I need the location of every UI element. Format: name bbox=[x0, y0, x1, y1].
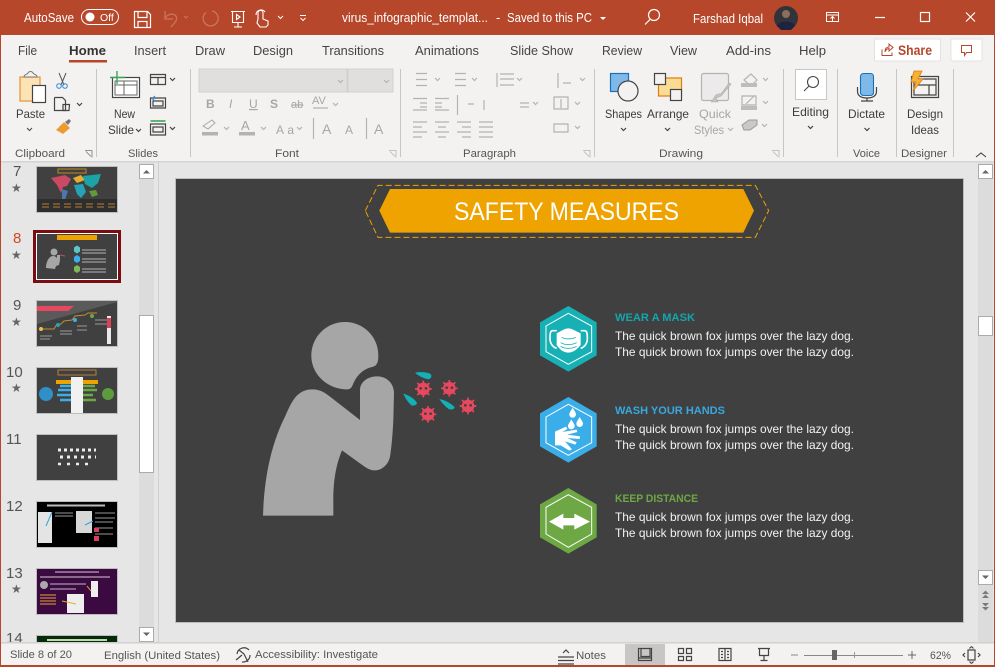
ribbon group: editing bbox=[792, 70, 829, 128]
ribbon group: font: I bbox=[229, 97, 233, 111]
ribbon group: slides: Slide bbox=[108, 123, 134, 137]
ribbon group: font: A bbox=[345, 123, 353, 137]
status bar: English (United States) bbox=[104, 650, 220, 662]
ribbon tabs: Add-ins bbox=[726, 43, 772, 58]
ribbon tabs: Review bbox=[602, 43, 643, 58]
text block: keep distance: The quick brown fox jumps over the lazy dog. bbox=[615, 526, 854, 540]
title banner: SAFETY MEASURES bbox=[454, 198, 679, 226]
thumbnail 7: world map: 7 bbox=[13, 163, 21, 180]
title bar: Saved to this PC bbox=[507, 10, 592, 25]
ribbon tabs: Animations bbox=[415, 43, 479, 58]
ribbon group: designer: Designer bbox=[901, 148, 947, 160]
thumbnail 8: selected slide bbox=[11, 230, 121, 283]
text block: wash your hands: WASH YOUR HANDS bbox=[615, 405, 725, 417]
ribbon group: drawing bbox=[605, 74, 779, 160]
title bar: virus_infographic_templat... bbox=[342, 10, 488, 25]
status bar: Notes bbox=[576, 650, 607, 662]
ribbon group: font: A bbox=[322, 121, 332, 137]
thumbnail 9: timeline: ★ bbox=[11, 315, 22, 329]
icon: wear a mask bbox=[540, 306, 597, 372]
ribbon group: font: B bbox=[206, 97, 215, 111]
ribbon group: drawing: Styles bbox=[694, 123, 724, 137]
ribbon tabs bbox=[1, 35, 994, 162]
ribbon group: drawing: Arrange bbox=[647, 107, 689, 121]
thumbnail 14 bbox=[6, 630, 118, 647]
text block: wear a mask bbox=[615, 312, 854, 359]
ribbon tabs: Help bbox=[799, 43, 826, 58]
ribbon group: drawing: Drawing bbox=[659, 148, 703, 160]
thumbnail 8: selected slide: 8 bbox=[13, 230, 21, 247]
ribbon group: drawing: Shapes bbox=[605, 107, 642, 121]
thumbnail 10: ★ bbox=[11, 381, 22, 395]
share button bbox=[874, 39, 982, 61]
ribbon tabs: Home bbox=[69, 43, 106, 58]
thumbnail 14: 14 bbox=[6, 630, 23, 647]
ribbon group: font: Aa bbox=[276, 123, 294, 137]
icon: keep distance bbox=[540, 488, 597, 554]
title bar bbox=[0, 0, 995, 35]
title bar: - bbox=[496, 10, 500, 25]
ribbon group: clipboard bbox=[15, 72, 92, 160]
thumbnail 11 bbox=[6, 431, 118, 480]
text block: wash your hands bbox=[615, 405, 854, 452]
title banner bbox=[365, 185, 769, 237]
status bar: Accessibility: Investigate bbox=[255, 649, 378, 661]
ribbon group: designer: Ideas bbox=[911, 123, 939, 137]
ribbon tabs: Draw bbox=[195, 43, 226, 58]
title bar: AutoSave bbox=[24, 10, 74, 25]
status bar bbox=[1, 642, 994, 665]
ribbon tabs: View bbox=[670, 43, 698, 58]
ribbon group: voice: Voice bbox=[853, 148, 880, 160]
ribbon tabs: Transitions bbox=[322, 43, 384, 58]
share button: Share bbox=[898, 43, 932, 58]
text block: wear a mask: WEAR A MASK bbox=[615, 312, 695, 324]
thumbnail 7: world map: ★ bbox=[11, 181, 22, 195]
ribbon group: font: A bbox=[241, 118, 250, 133]
thumbnail 7: world map bbox=[11, 163, 118, 212]
thumbnail 9: timeline bbox=[11, 297, 118, 346]
icon: wash your hands bbox=[540, 397, 597, 463]
thumbnail 13 bbox=[6, 565, 118, 614]
thumbnail 12 bbox=[6, 498, 118, 548]
text block: keep distance: The quick brown fox jumps over the lazy dog. bbox=[615, 510, 854, 524]
ribbon tabs: File bbox=[18, 43, 37, 58]
thumbnail 9: timeline: 9 bbox=[13, 297, 21, 314]
thumbnail pane bbox=[6, 163, 121, 647]
title bar: Off bbox=[100, 12, 114, 24]
thumbnail 13: ★ bbox=[11, 582, 22, 596]
thumbnail 10: 10 bbox=[6, 364, 23, 381]
ribbon tabs: Design bbox=[253, 43, 293, 58]
status bar: Slide 8 of 20 bbox=[10, 649, 72, 661]
ribbon group: clipboard: Paste bbox=[16, 107, 45, 121]
ribbon group: font: ab bbox=[291, 99, 303, 111]
ribbon group: voice bbox=[848, 74, 885, 160]
ribbon group: font: Font bbox=[275, 148, 299, 160]
ribbon tabs: Slide Show bbox=[510, 43, 574, 58]
text block: wash your hands: The quick brown fox jumps over the lazy dog. bbox=[615, 422, 854, 436]
virus particles and droplets bbox=[403, 372, 476, 423]
ribbon group: slides: New bbox=[114, 107, 135, 121]
ribbon group: font: S bbox=[270, 97, 278, 111]
text block: wear a mask: The quick brown fox jumps over the lazy dog. bbox=[615, 329, 854, 343]
ribbon group: font: AV bbox=[312, 95, 327, 107]
thumbnail 10 bbox=[6, 364, 118, 414]
thumbnail 13: 13 bbox=[6, 565, 23, 582]
status bar: 62% bbox=[930, 650, 951, 662]
slide canvas bbox=[176, 178, 964, 622]
thumbnail 8: selected slide: ★ bbox=[11, 248, 22, 262]
ribbon group: paragraph: Paragraph bbox=[463, 148, 516, 160]
coughing person figure bbox=[263, 322, 394, 516]
ribbon group: drawing: Quick bbox=[699, 107, 732, 121]
ribbon group: voice: Dictate bbox=[848, 107, 885, 121]
thumbnail 11: 11 bbox=[6, 431, 22, 448]
ribbon group: editing: Editing bbox=[792, 105, 829, 119]
right scrollbar bbox=[978, 162, 993, 643]
ribbon group: clipboard: Clipboard bbox=[15, 148, 65, 160]
left scrollbar bbox=[139, 162, 158, 643]
ribbon group: paragraph bbox=[413, 73, 590, 160]
text block: wear a mask: The quick brown fox jumps over the lazy dog. bbox=[615, 345, 854, 359]
ribbon group: slides bbox=[108, 71, 175, 160]
ribbon group: font: A bbox=[374, 121, 384, 137]
thumbnail 12: 12 bbox=[6, 498, 23, 515]
text block: wash your hands: The quick brown fox jumps over the lazy dog. bbox=[615, 438, 854, 452]
ribbon group: slides: Slides bbox=[128, 148, 158, 160]
ribbon tabs: Insert bbox=[134, 43, 166, 58]
ribbon group: font: U bbox=[249, 97, 258, 111]
text block: keep distance: KEEP DISTANCE bbox=[615, 493, 698, 505]
ribbon group: font bbox=[199, 69, 396, 160]
ribbon group: designer bbox=[901, 71, 986, 160]
title bar: Farshad Iqbal bbox=[693, 11, 763, 26]
ribbon group: designer: Design bbox=[907, 107, 943, 121]
text block: keep distance bbox=[615, 493, 854, 540]
